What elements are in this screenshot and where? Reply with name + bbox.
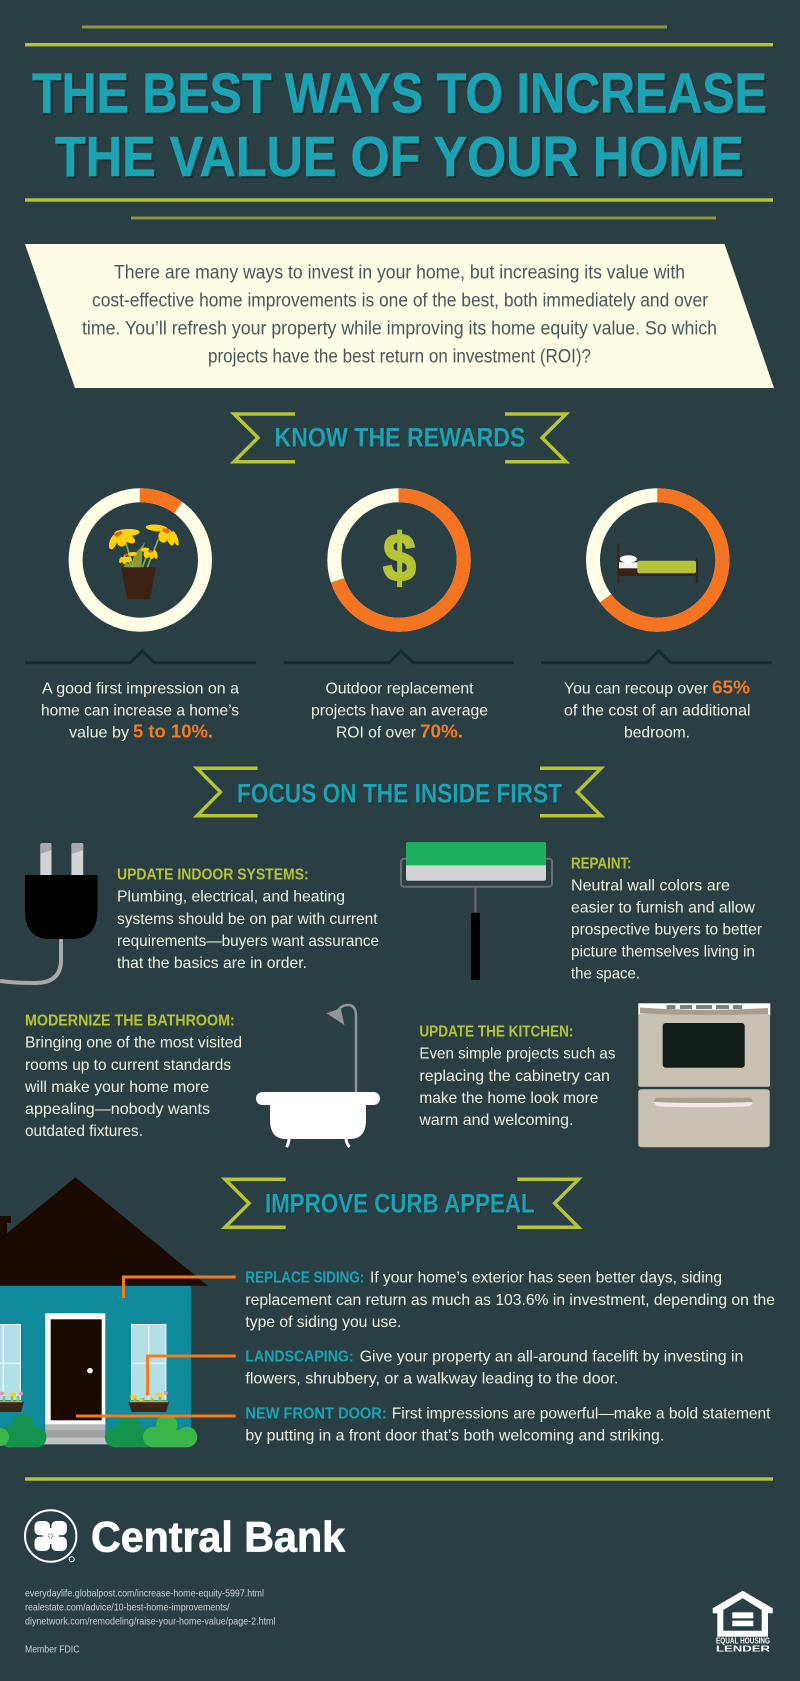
text block: modernize the bathroom: will make your home more bbox=[24, 1079, 209, 1096]
divider bbox=[284, 651, 514, 663]
text block: update indoor systems: requirements—buyers want assurance bbox=[117, 933, 379, 950]
text block: repaint: Neutral wall colors are bbox=[571, 878, 730, 895]
section heading: know the rewards: KNOW THE REWARDS bbox=[274, 423, 526, 453]
caption bbox=[564, 677, 750, 741]
text block: landscaping: Give your property an all-around facelift by investing in bbox=[360, 1349, 743, 1366]
text block: replace siding bbox=[245, 1270, 775, 1331]
text block: modernize the bathroom: Bringing one of the most visited bbox=[25, 1035, 242, 1052]
caption: Outdoor replacement bbox=[326, 680, 474, 697]
text block: new front door: by putting in a front door that’s both welcoming and striking. bbox=[245, 1428, 664, 1445]
shrubs bbox=[0, 1414, 197, 1448]
icon: equal housing lender: EQUAL HOUSING bbox=[716, 1636, 770, 1645]
intro panel: projects have the best return on investment (ROI)? bbox=[208, 347, 591, 368]
text block: replace siding: replacement can return as much as 103.6% in investment, depending on the bbox=[245, 1292, 775, 1309]
illustration: house bbox=[0, 1177, 236, 1448]
section heading: improve curb appeal bbox=[225, 1179, 578, 1227]
text block: update indoor systems: that the basics are in order. bbox=[117, 955, 307, 972]
text block: update the kitchen: make the home look more bbox=[419, 1090, 598, 1107]
divider bbox=[541, 651, 772, 663]
text block: update indoor systems: Plumbing, electrical, and heating bbox=[117, 889, 345, 906]
front steps bbox=[43, 1424, 107, 1444]
panel: outdoor replacement reward bbox=[284, 495, 514, 741]
left flower box bbox=[0, 1392, 24, 1412]
icon: bathtub with shower bbox=[256, 1005, 380, 1147]
icon: paint roller bbox=[401, 842, 552, 980]
section heading: improve curb appeal: IMPROVE CURB APPEAL bbox=[265, 1189, 535, 1219]
caption: of the cost of an additional bbox=[564, 702, 750, 719]
ring chart: 65 percent bbox=[593, 495, 722, 625]
text block: modernize the bathroom: appealing—nobody wants bbox=[25, 1101, 210, 1118]
text block: modernize the bathroom bbox=[24, 1013, 242, 1140]
text block: modernize the bathroom: outdated fixtures. bbox=[25, 1123, 143, 1140]
divider bbox=[25, 651, 256, 663]
caption: bedroom. bbox=[624, 724, 690, 741]
text block: repaint: easier to furnish and allow bbox=[571, 900, 755, 917]
text block: modernize the bathroom: rooms up to current standards bbox=[25, 1057, 231, 1074]
text block: update the kitchen: warm and welcoming. bbox=[418, 1112, 573, 1129]
text block: repaint: REPAINT: bbox=[571, 855, 632, 872]
caption: projects have an average bbox=[311, 702, 488, 719]
caption: A good first impression on a bbox=[42, 680, 239, 697]
logo wordmark: Central Bank bbox=[91, 1514, 345, 1562]
icon: electric plug bbox=[0, 843, 98, 983]
text block: landscaping bbox=[245, 1349, 743, 1388]
text block: landscaping: flowers, shrubbery, or a walkway leading to the door. bbox=[245, 1371, 618, 1388]
intro panel: time. You’ll refresh your property while improving its home equity value. So which bbox=[82, 319, 717, 340]
title bbox=[25, 26, 773, 220]
house wall bbox=[0, 1285, 191, 1444]
panel: first impression reward bbox=[25, 495, 256, 741]
icon: equal housing lender: LENDER bbox=[716, 1644, 770, 1654]
text block: update the kitchen: Even simple projects such as bbox=[419, 1046, 615, 1063]
text block: update indoor systems: UPDATE INDOOR SYSTEMS: bbox=[117, 866, 309, 883]
logo mark bbox=[25, 1510, 76, 1562]
ring chart: 70 percent bbox=[334, 495, 464, 625]
source list: diynetwork.com/remodeling/raise-your-home-value/page-2.html bbox=[25, 1615, 276, 1627]
text block: replace siding: If your home’s exterior has seen better days, siding bbox=[370, 1270, 722, 1287]
chimney bbox=[0, 1216, 11, 1246]
section heading: focus on the inside first bbox=[197, 768, 601, 816]
text block: repaint: picture themselves living in bbox=[571, 944, 755, 961]
panel: additional bedroom reward bbox=[541, 495, 772, 741]
callout lines bbox=[76, 1277, 236, 1416]
roof bbox=[0, 1177, 208, 1286]
icon: stove bbox=[638, 1003, 770, 1147]
text block: modernize the bathroom: MODERNIZE THE BATHROOM: bbox=[25, 1013, 235, 1030]
icon: flower pot bbox=[107, 524, 180, 599]
source list: Member FDIC bbox=[25, 1643, 80, 1655]
source list bbox=[25, 1588, 276, 1655]
ring chart: 10 percent bbox=[76, 495, 205, 625]
text block: update the kitchen bbox=[418, 1023, 615, 1129]
caption bbox=[311, 680, 488, 741]
section heading: know the rewards bbox=[234, 414, 566, 462]
right window bbox=[131, 1324, 166, 1400]
intro panel: cost-effective home improvements is one of the best, both immediately and over bbox=[92, 291, 709, 312]
text block: update indoor systems: systems should be on par with current bbox=[117, 911, 378, 928]
caption: value by bbox=[69, 724, 129, 741]
text block: landscaping: LANDSCAPING: bbox=[245, 1349, 354, 1366]
caption: home can increase a home’s bbox=[41, 702, 239, 719]
icon: equal housing lender bbox=[713, 1591, 773, 1654]
text block: replace siding: type of siding you use. bbox=[245, 1314, 401, 1331]
text block: new front door bbox=[245, 1406, 771, 1445]
intro panel: There are many ways to invest in your home, but increasing its value with bbox=[114, 263, 685, 284]
section heading: focus on the inside first: FOCUS ON THE INSIDE FIRST bbox=[237, 778, 562, 808]
text block: repaint: the space. bbox=[571, 966, 640, 983]
intro panel bbox=[25, 244, 774, 388]
caption: 5 to 10%. bbox=[133, 721, 213, 741]
caption: ROI of over bbox=[336, 724, 417, 741]
caption bbox=[41, 680, 239, 741]
text block: replace siding: REPLACE SIDING: bbox=[245, 1270, 364, 1287]
caption: 70%. bbox=[420, 721, 463, 741]
text block: update the kitchen: replacing the cabinetry can bbox=[419, 1068, 610, 1085]
front door bbox=[45, 1313, 105, 1425]
text block: repaint bbox=[571, 855, 763, 983]
text block: repaint: prospective buyers to better bbox=[571, 922, 763, 939]
icon: dollar sign: $ bbox=[383, 520, 416, 596]
right flower box bbox=[128, 1391, 169, 1412]
text block: new front door: NEW FRONT DOOR: bbox=[245, 1406, 387, 1423]
left window bbox=[0, 1324, 21, 1400]
text block: update the kitchen: UPDATE THE KITCHEN: bbox=[419, 1023, 573, 1040]
icon: bed bbox=[617, 543, 698, 583]
caption: 65% bbox=[712, 677, 750, 697]
caption: You can recoup over bbox=[564, 680, 709, 697]
source list: everydaylife.globalpost.com/increase-home-equity-5997.html bbox=[25, 1588, 264, 1600]
text block: new front door: First impressions are powerful—make a bold statement bbox=[392, 1406, 771, 1423]
text block: update indoor systems bbox=[117, 866, 379, 972]
source list: realestate.com/advice/10-best-home-improvements/ bbox=[25, 1601, 230, 1613]
logo: Central Bank bbox=[25, 1510, 345, 1562]
